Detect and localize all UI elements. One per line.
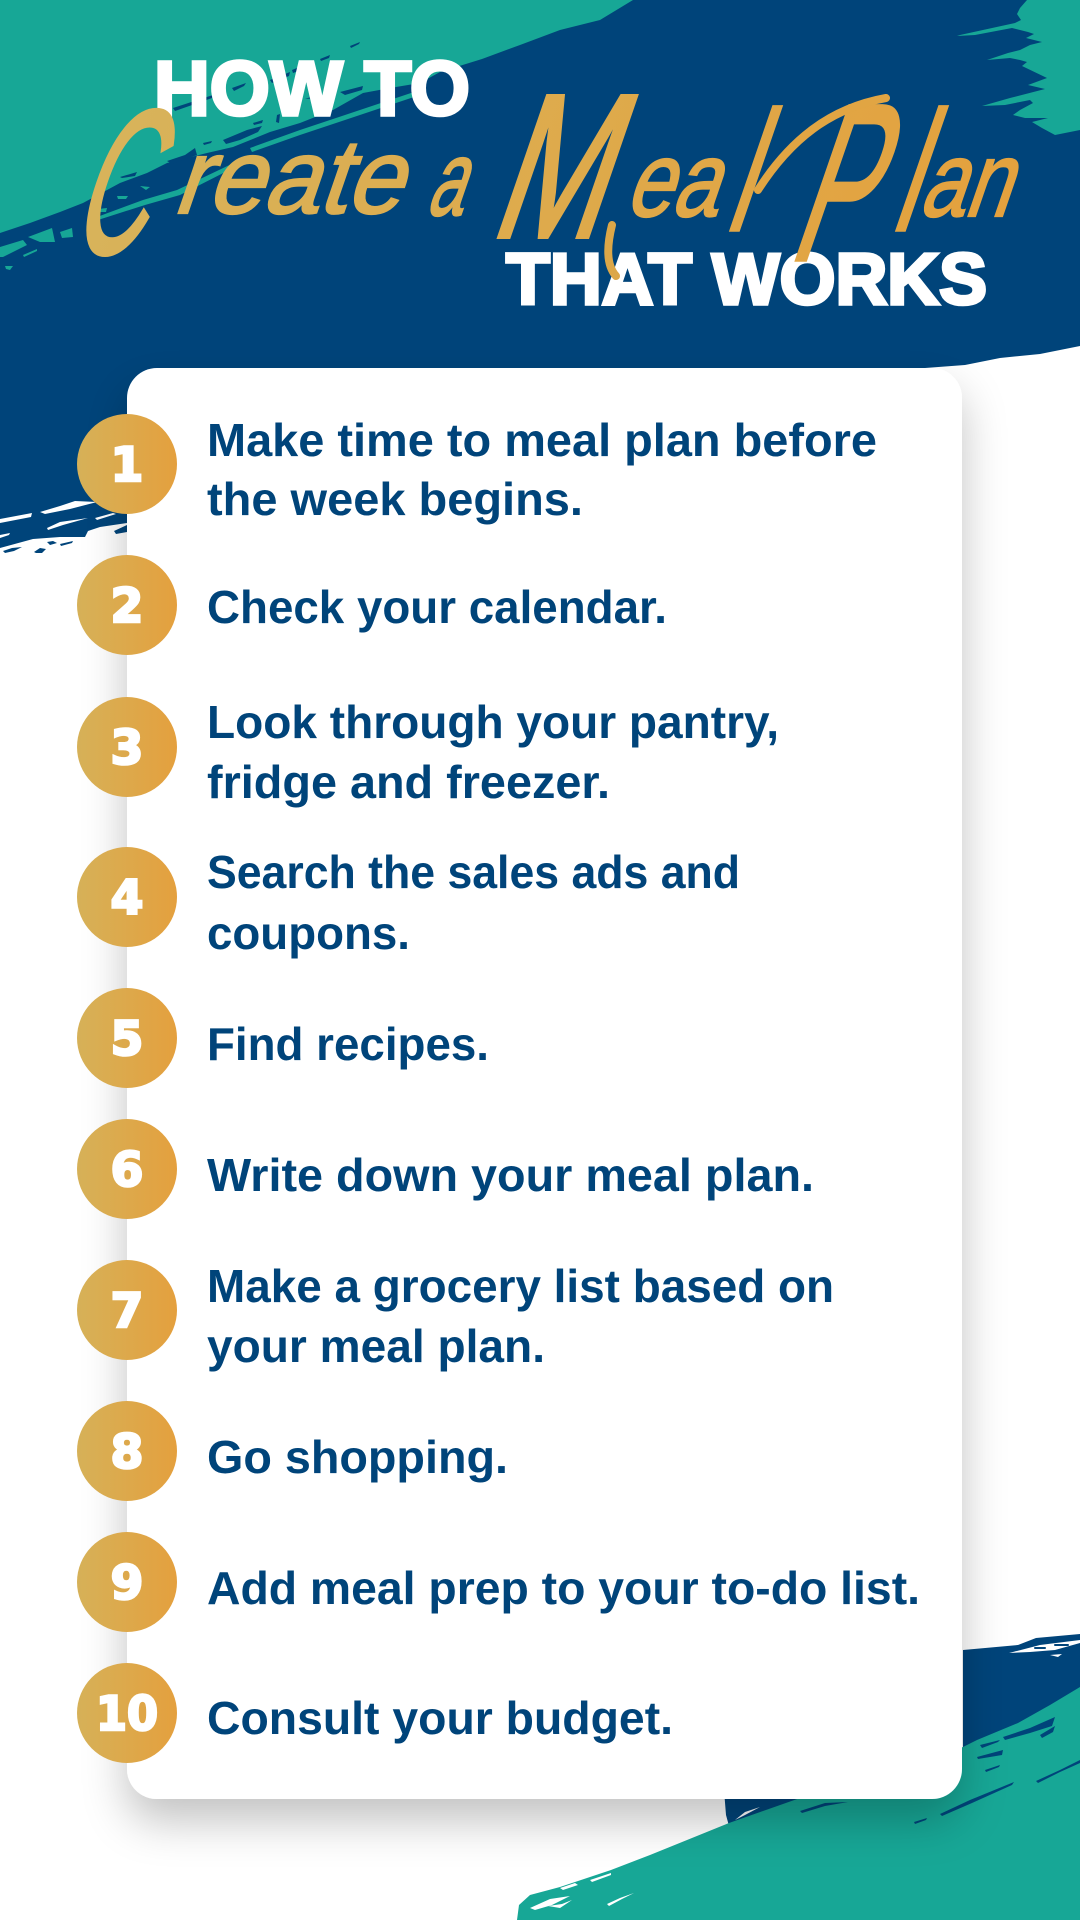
step 4: Search the sales ads and (207, 846, 740, 898)
step 1: 1 (111, 438, 143, 493)
step 1: the week begins. (207, 473, 583, 525)
step 10: Consult your budget. (207, 1692, 673, 1744)
step 10 (77, 1663, 673, 1763)
step 9: Add meal prep to your to-do list. (207, 1562, 920, 1614)
step 3: Look through your pantry, (207, 696, 779, 748)
panel: steps card (127, 368, 962, 1799)
step 4: 4 (111, 871, 143, 926)
step 8: Go shopping. (207, 1431, 508, 1483)
step 7: Make a grocery list based on (207, 1260, 834, 1312)
title: Create a Meal Plan script: an (910, 121, 1040, 239)
background: bottom navy brush stroke (724, 1634, 1080, 1826)
step 3 (77, 696, 779, 808)
step 7 (77, 1260, 834, 1372)
background: top-left teal brush stroke (0, 0, 633, 270)
step 3: fridge and freezer. (207, 756, 610, 808)
title: Create a Meal Plan script: l (711, 77, 798, 267)
step 1 (77, 414, 877, 525)
step 5: 5 (111, 1012, 143, 1067)
title: Create a Meal Plan script: l (877, 77, 964, 267)
step 8 (77, 1401, 508, 1501)
title: Create a Meal Plan script: reate (164, 118, 432, 236)
background: top-right teal brush stroke (957, 0, 1080, 135)
step 8: 8 (111, 1425, 143, 1480)
step 6 (77, 1119, 814, 1219)
title: Create a Meal Plan script: C (53, 67, 204, 297)
title: Create a Meal Plan script: a (417, 120, 494, 238)
step 2 (77, 555, 667, 655)
step 6: 6 (111, 1143, 143, 1198)
step 7: 7 (111, 1284, 143, 1339)
step 4: coupons. (207, 907, 410, 959)
title: Create a Meal Plan script: M (472, 51, 663, 281)
title: Create a Meal Plan script (49, 51, 1064, 308)
step 4 (77, 846, 740, 959)
title: Create a Meal Plan script: ea (616, 121, 749, 239)
step 2: Check your calendar. (207, 581, 667, 633)
step 1: Make time to meal plan before (207, 414, 877, 466)
step 5 (77, 988, 489, 1088)
step 6: Write down your meal plan. (207, 1149, 814, 1201)
step 5: Find recipes. (207, 1018, 489, 1070)
step 7: your meal plan. (207, 1320, 545, 1372)
title: How To: HOW TO (154, 46, 470, 132)
step 9 (77, 1532, 920, 1632)
title: That Works: THAT WORKS (506, 240, 987, 320)
step 3: 3 (111, 721, 143, 776)
step 2: 2 (111, 579, 143, 634)
background: bottom teal brush stroke (517, 1687, 1080, 1920)
step 10: 10 (96, 1687, 158, 1742)
step 9: 9 (111, 1556, 143, 1611)
background: top navy brush stroke (0, 0, 1080, 553)
title: Create a Meal Plan script: P (770, 57, 932, 308)
